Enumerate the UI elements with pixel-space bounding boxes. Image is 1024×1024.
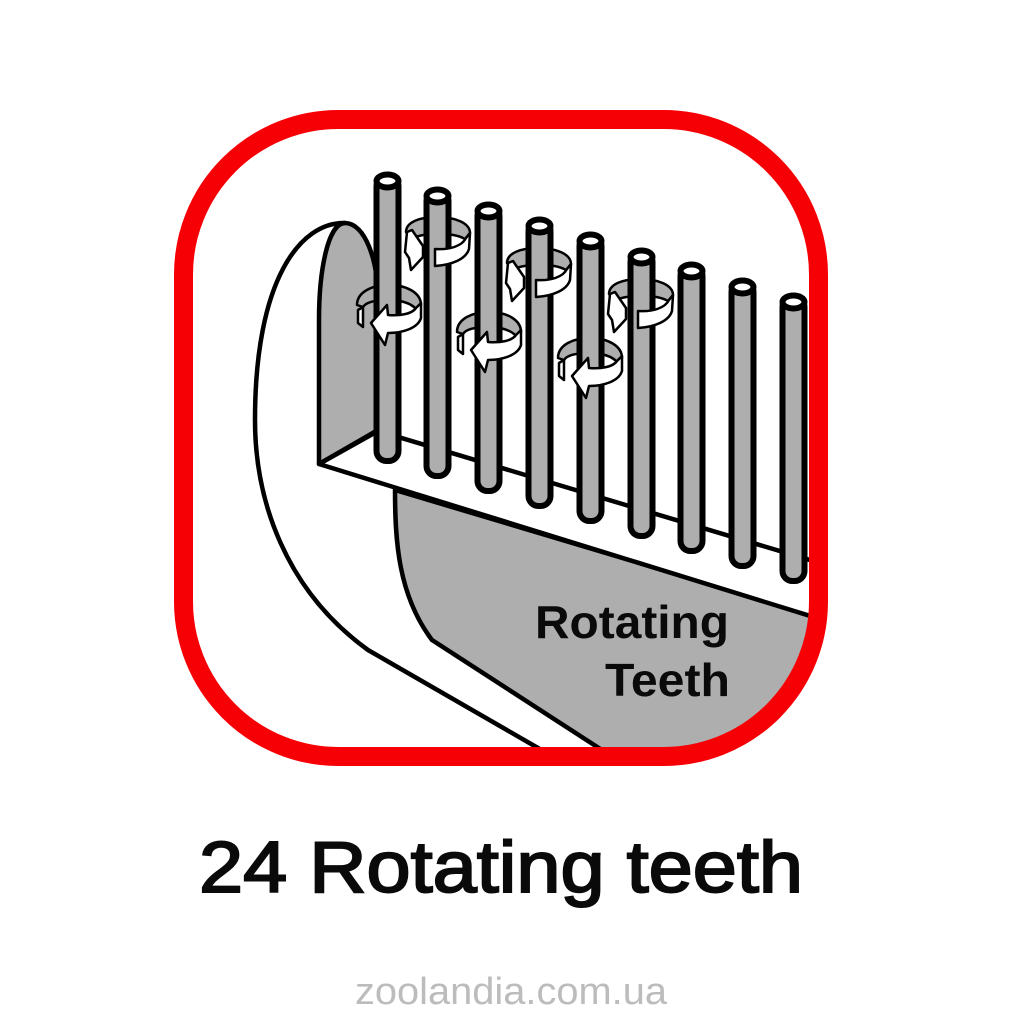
watermark: zoolandia.com.ua xyxy=(355,971,668,1013)
label: Rotating Teeth xyxy=(535,596,730,706)
rotation arrows: front halves xyxy=(371,230,673,398)
grey underside panel xyxy=(395,490,830,760)
rotating teeth row xyxy=(376,174,804,581)
illustration: brush head xyxy=(255,223,830,760)
grey end cap xyxy=(319,223,378,464)
label: Rotating Teeth: Teeth xyxy=(605,654,730,706)
red rounded frame xyxy=(184,120,818,756)
rotation rings: back halves xyxy=(357,217,673,380)
infographic canvas xyxy=(174,110,828,1004)
title: 24 Rotating teeth xyxy=(199,828,803,908)
base plate of brush xyxy=(319,431,820,619)
label: Rotating Teeth: Rotating xyxy=(535,596,729,648)
roller body outline xyxy=(252,220,541,747)
